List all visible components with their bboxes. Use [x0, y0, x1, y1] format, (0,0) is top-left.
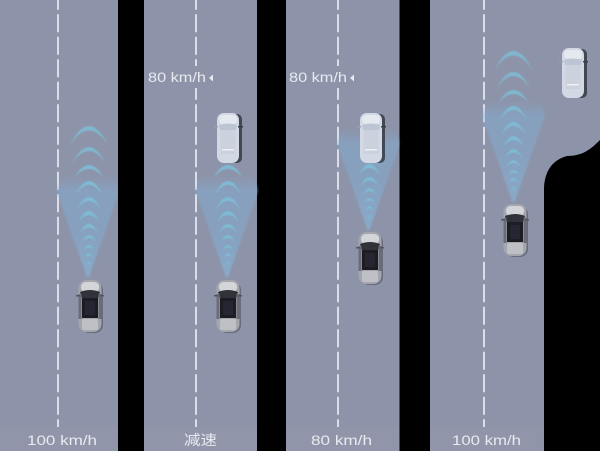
lane dashes [337, 0, 339, 427]
radar waves [70, 126, 108, 266]
status label: 减速 [184, 432, 217, 448]
lead car [214, 113, 243, 163]
radar waves [360, 164, 379, 218]
road surface [144, 0, 257, 451]
road surface [0, 0, 118, 451]
radar cone [57, 176, 119, 277]
arrow: slower [350, 74, 354, 82]
lane dashes [483, 0, 485, 427]
panel: 100 km/h cruising [0, 0, 119, 451]
radar cone [482, 101, 545, 202]
speed band [430, 427, 544, 451]
lead car [357, 113, 386, 163]
speed band [0, 427, 118, 451]
lane dashes [195, 0, 197, 427]
radar waves [213, 165, 243, 266]
exiting car [559, 48, 588, 98]
road surface [286, 0, 400, 451]
road surface with exit lane [430, 0, 600, 451]
panel: lead car exits, resume 100 km/h [430, 0, 600, 451]
radar cone [337, 129, 400, 230]
speed label: 100 km/h [27, 432, 97, 448]
panel: 80 km/h following [286, 0, 400, 451]
own car [76, 280, 104, 333]
own car [214, 280, 242, 333]
road patch behind speed text [332, 66, 344, 88]
panel: deceleration [144, 0, 258, 451]
radar waves [494, 51, 532, 191]
lead car speed label: 80 km/h [148, 69, 206, 85]
lead car speed label: 80 km/h [289, 69, 347, 85]
radar cone [196, 176, 258, 277]
road patch behind speed text [190, 66, 202, 88]
speed band [144, 427, 257, 451]
lane dashes [57, 0, 59, 427]
own car [501, 204, 529, 257]
arrow: slower [209, 74, 213, 82]
speed label: 80 km/h [311, 432, 372, 448]
speed label: 100 km/h [452, 432, 521, 448]
own car [356, 232, 384, 285]
speed band [286, 427, 400, 451]
